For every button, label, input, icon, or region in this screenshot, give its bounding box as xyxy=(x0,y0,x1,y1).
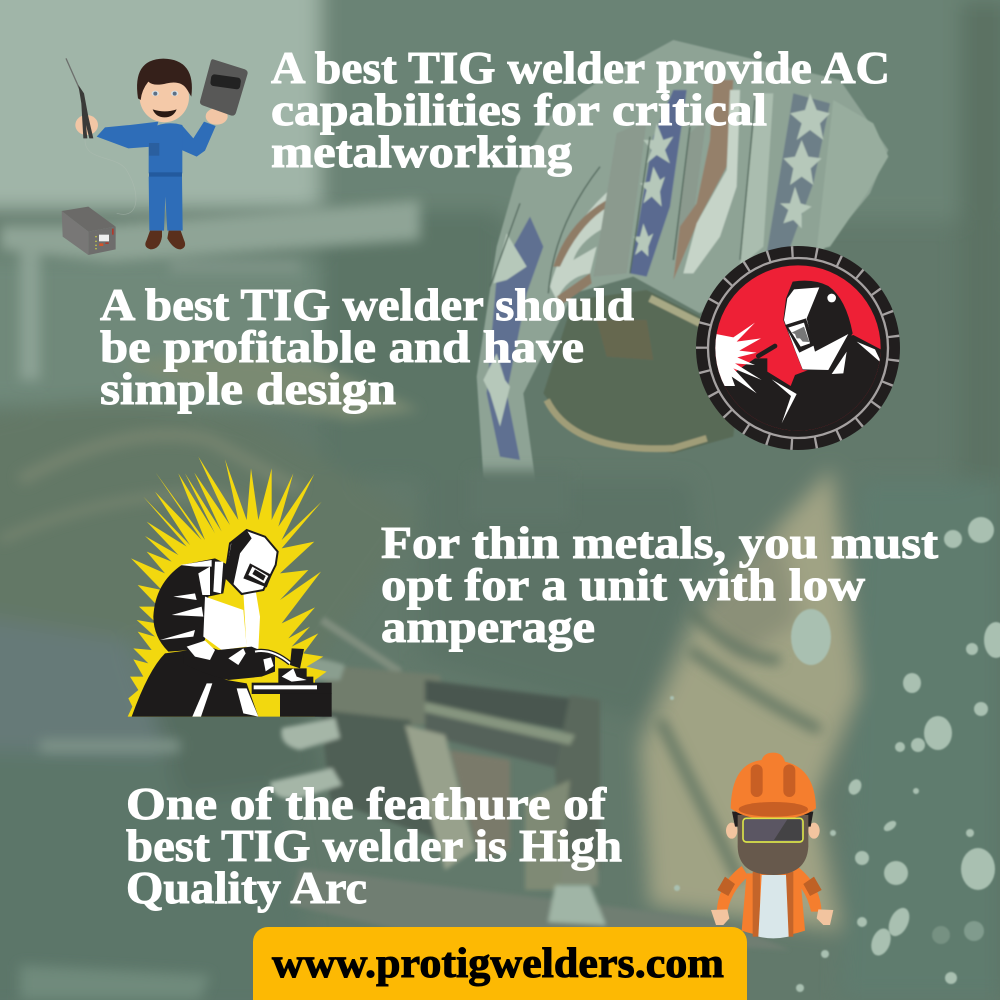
text: high quality arc: Quality Arc xyxy=(126,862,367,913)
text: high quality arc xyxy=(126,778,622,913)
text: thin metals low amperage: amperage xyxy=(381,601,595,652)
text: AC capabilities: capabilities for critical xyxy=(271,84,767,135)
icon: woodcut welder with yellow burst xyxy=(128,457,332,717)
text: thin metals low amperage xyxy=(381,517,939,652)
website pill xyxy=(253,927,747,1000)
text: profitable and simple design xyxy=(100,279,634,414)
icon: welder man holding torch and mask xyxy=(62,58,248,255)
text: AC capabilities xyxy=(271,42,890,177)
text: AC capabilities: A best TIG welder provide AC xyxy=(271,42,890,93)
text: profitable and simple design: A best TIG welder should xyxy=(100,279,634,330)
website pill: www.protigwelders.com xyxy=(272,941,724,987)
helmet xyxy=(477,40,888,493)
helmet lower fade xyxy=(470,470,570,520)
text: high quality arc: best TIG welder is High xyxy=(126,820,622,871)
welding torch and gloves xyxy=(270,620,600,890)
icon: round welder badge xyxy=(696,246,900,450)
bokeh sparks xyxy=(670,517,1000,992)
text: thin metals low amperage: opt for a unit with low xyxy=(381,559,865,610)
steel pipe xyxy=(290,868,790,950)
text: high quality arc: One of the feathure of xyxy=(126,778,607,829)
text: AC capabilities: metalworking xyxy=(271,126,572,177)
glove creases xyxy=(660,610,820,880)
icon: bearded worker in orange hard hat xyxy=(711,753,833,938)
icon: welding power unit xyxy=(62,207,116,255)
text: thin metals low amperage: For thin metals, you must xyxy=(381,517,939,568)
text: profitable and simple design: simple design xyxy=(100,363,396,414)
text: profitable and simple design: be profitable and have xyxy=(100,321,584,372)
